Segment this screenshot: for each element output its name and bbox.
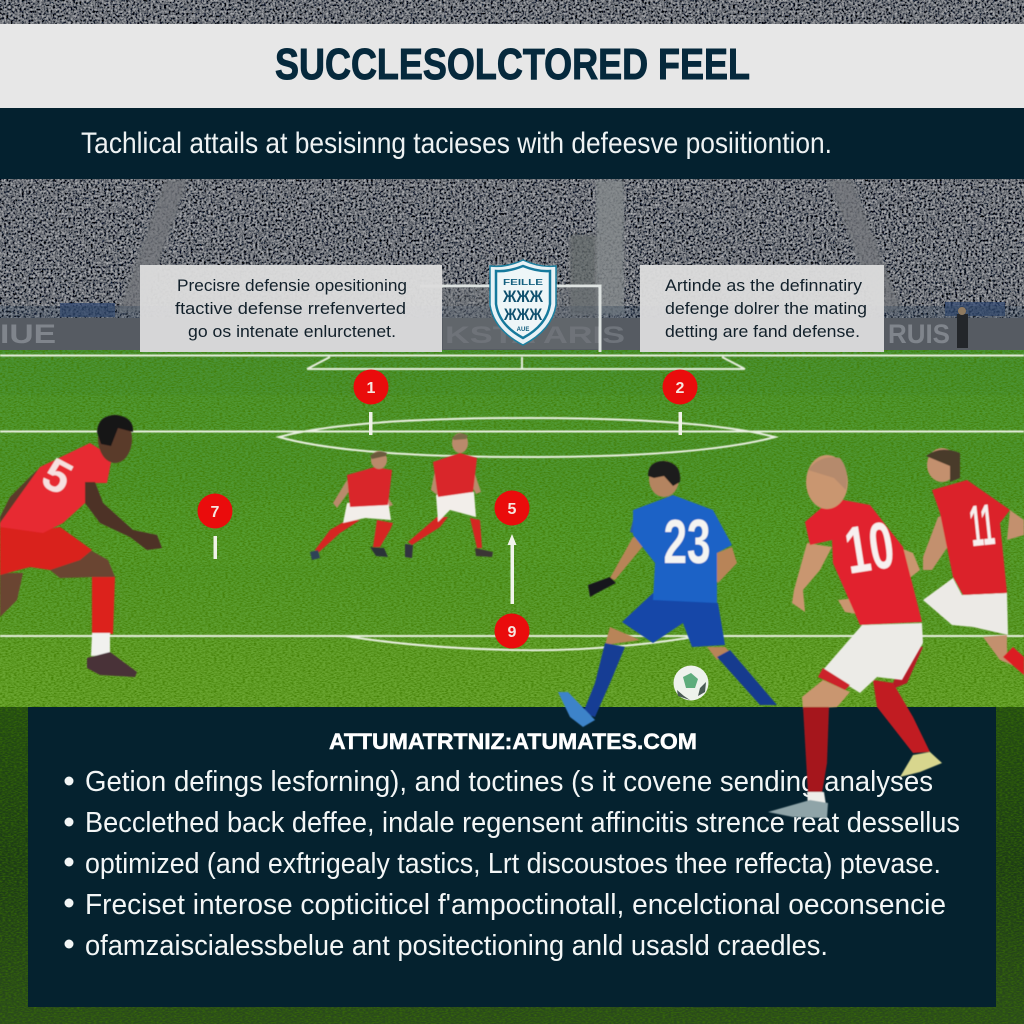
icon: crest shield: FEILLE	[503, 278, 544, 287]
goal frame	[420, 286, 600, 352]
callout: left: Precisre defensie opesitioning	[177, 276, 407, 295]
player: red 10	[768, 455, 942, 818]
bullet list: optimized (and exftrigealy tastics, Lrt discoustoes thee reffecta) ptevase.	[85, 848, 941, 880]
bullet list: ofamzaiscialessbelue ant positectioning anld usasld craedles.	[85, 930, 828, 962]
marker 7: 7	[211, 504, 220, 521]
player: left red 5: 5	[34, 447, 81, 505]
icon: crest shield	[490, 260, 556, 345]
callout: right: defenge dolrer the mating	[665, 299, 867, 318]
icon: crest shield: ЖЖЖ	[502, 287, 544, 306]
advertising boards	[0, 307, 1024, 350]
callout: right: detting are fand defense.	[665, 322, 860, 341]
marker 1	[354, 370, 388, 435]
marker 1: 1	[367, 380, 376, 397]
callout: left	[140, 265, 442, 352]
subtitle band	[0, 108, 1024, 179]
callout: right	[640, 265, 884, 352]
bottom text panel	[28, 707, 996, 1007]
player: red 10: 10	[840, 507, 899, 588]
advertising boards: KSTA ARIS	[445, 322, 625, 349]
football	[674, 666, 708, 700]
icon: crest shield: ЖЖЖ	[503, 305, 543, 324]
panel heading: ATTUMATRTNIZ:ATUMATES.COM	[329, 729, 697, 754]
callout: left: ftactive defense rrefenverted	[175, 299, 406, 318]
player: mid red A	[310, 451, 393, 560]
player: blue 23	[558, 461, 777, 727]
marker 9	[494, 614, 530, 648]
arrow: 9 to 5	[508, 534, 516, 604]
callout: left: go os intenate enlurctenet.	[188, 322, 396, 341]
title band	[0, 24, 1024, 108]
marker 5	[494, 490, 530, 526]
marker 2: 2	[676, 380, 685, 397]
player: red 11	[890, 448, 1024, 690]
lower dark grass	[0, 707, 1024, 1024]
marker 2	[662, 370, 698, 435]
callout: right: Artinde as the definnatiry	[665, 276, 863, 295]
subtitle: Tachlical attails at besisinng tacieses with defeesve posiitiontion.	[81, 127, 832, 160]
icon: crest shield: AUE	[517, 327, 529, 333]
player: blue 23: 23	[664, 508, 710, 577]
title: SUCCLESOLCTORED FEEL	[275, 40, 750, 89]
bullet list: Freciset interose copticiticel f'ampoctinotall, encelctional oeconsencie	[85, 889, 946, 921]
bullet list	[64, 766, 960, 962]
stadium crowd background	[0, 0, 1024, 350]
player: mid red B	[405, 433, 493, 558]
marker 9: 9	[508, 624, 517, 641]
player: left red 5	[0, 415, 162, 677]
pitch	[0, 350, 1024, 707]
advertising boards: IUE	[0, 319, 56, 349]
marker 7	[198, 494, 232, 559]
bullet list: Becclethed back deffee, indale regensent affincitis strence reat dessellus	[85, 807, 960, 839]
advertising boards: RUIS	[888, 319, 950, 349]
bullet list: Getion defings lesforning), and toctines (s it covene sending analyses	[85, 766, 933, 798]
marker 5: 5	[508, 501, 517, 518]
pitch markings	[0, 356, 1024, 650]
